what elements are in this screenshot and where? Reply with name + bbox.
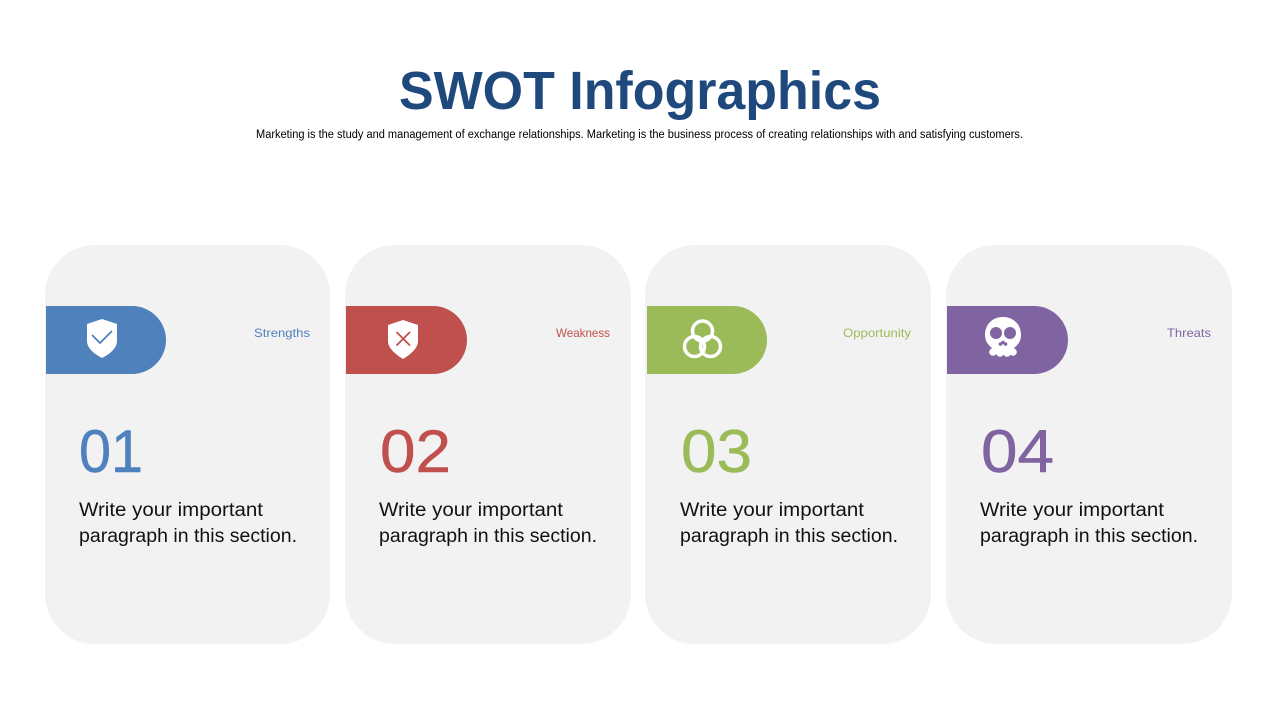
number 04: 04 [981,418,1054,485]
paragraph: strengths [79,500,297,547]
paragraph: weakness: paragraph in this section. [379,526,597,547]
icon: shield with check [87,319,117,358]
subtitle text: Marketing is the study and management of exchange relationships. Marketing is the business process of creating relationships with and satisfying customers. [256,129,1023,141]
paragraph: threats: Write your important [980,500,1165,521]
paragraph: threats: paragraph in this section. [980,526,1198,547]
paragraph: strengths: paragraph in this section. [79,526,297,547]
paragraph: opportunity: paragraph in this section. [680,526,898,547]
tab: threats [947,306,1068,374]
tab: strengths [46,306,166,374]
card background: weakness [345,245,631,644]
number 02: 02 [380,418,451,485]
paragraph: weakness [379,500,597,547]
panel: weakness [345,245,631,644]
card background: threats [946,245,1232,644]
number 01: 01 [79,418,143,485]
tab: opportunity [647,306,767,374]
number 03: 03 [681,418,752,485]
panel: strengths [45,245,330,644]
label: threats: Threats [1167,326,1211,340]
paragraph: opportunity: Write your important [680,500,865,521]
paragraph: strengths: Write your important [79,500,264,521]
label: weakness: Weakness [556,326,610,340]
panel: opportunity [645,245,931,644]
label: opportunity: Opportunity [843,326,911,340]
panel: threats [946,245,1232,644]
paragraph: weakness: Write your important [379,500,564,521]
paragraph: opportunity [680,500,898,547]
icon: three interlocking rings [684,321,720,356]
icon: skull [985,317,1021,357]
label: strengths: Strengths [254,326,310,340]
title: SWOT Infographics [399,61,881,121]
card background: opportunity [645,245,931,644]
icon: shield with cross [388,320,418,359]
card background: strengths [45,245,330,644]
tab: weakness [346,306,467,374]
paragraph: threats [980,500,1198,547]
